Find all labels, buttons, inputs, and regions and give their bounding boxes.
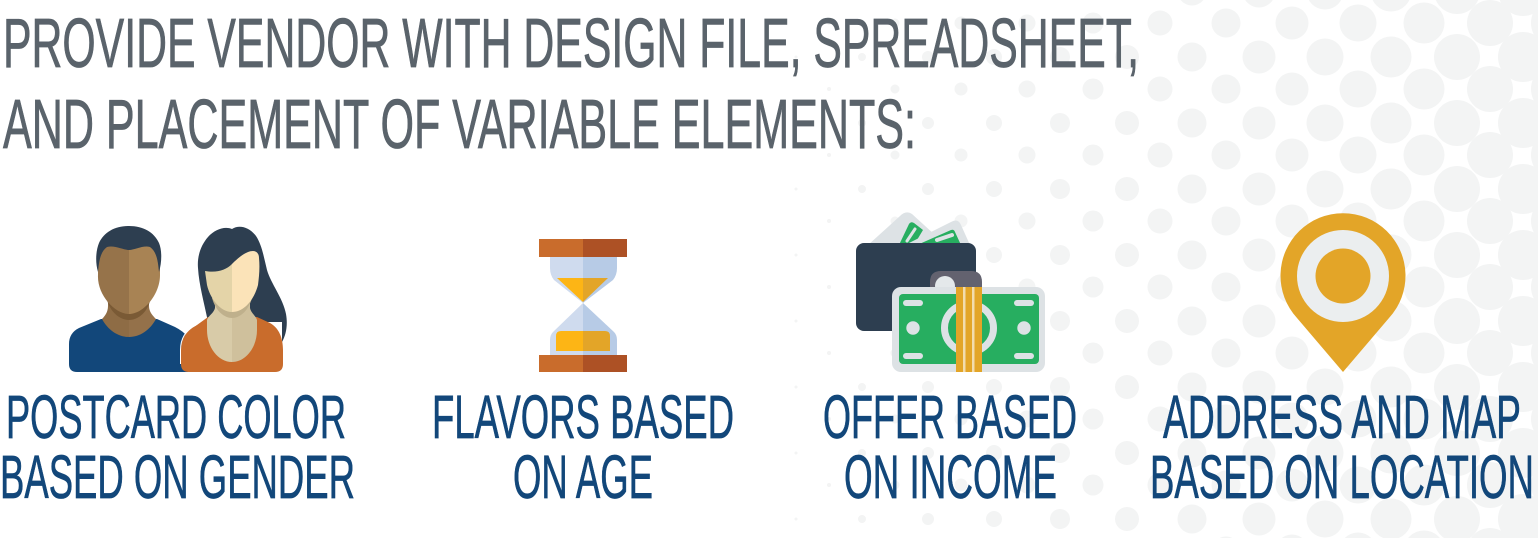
label: offer: ON INCOME — [844, 443, 1057, 511]
label: flavors — [432, 383, 734, 511]
label: postcard color: BASED ON GENDER — [0, 443, 355, 511]
icon: man and woman — [69, 226, 287, 372]
label: offer — [823, 383, 1077, 511]
label: address — [1150, 383, 1534, 511]
icon: hourglass — [539, 239, 627, 372]
icon: map pin — [1281, 213, 1406, 372]
label: postcard color — [0, 383, 355, 511]
background: halftone dot pattern — [796, 0, 1538, 538]
title: AND PLACEMENT OF VARIABLE ELEMENTS: — [3, 85, 916, 163]
icon: wallet and cash — [856, 212, 1045, 372]
label: postcard color: POSTCARD COLOR — [6, 383, 346, 451]
label: flavors: FLAVORS BASED — [432, 383, 734, 451]
label: offer: OFFER BASED — [823, 383, 1077, 451]
title — [3, 4, 1139, 163]
label: flavors: ON AGE — [513, 443, 653, 511]
